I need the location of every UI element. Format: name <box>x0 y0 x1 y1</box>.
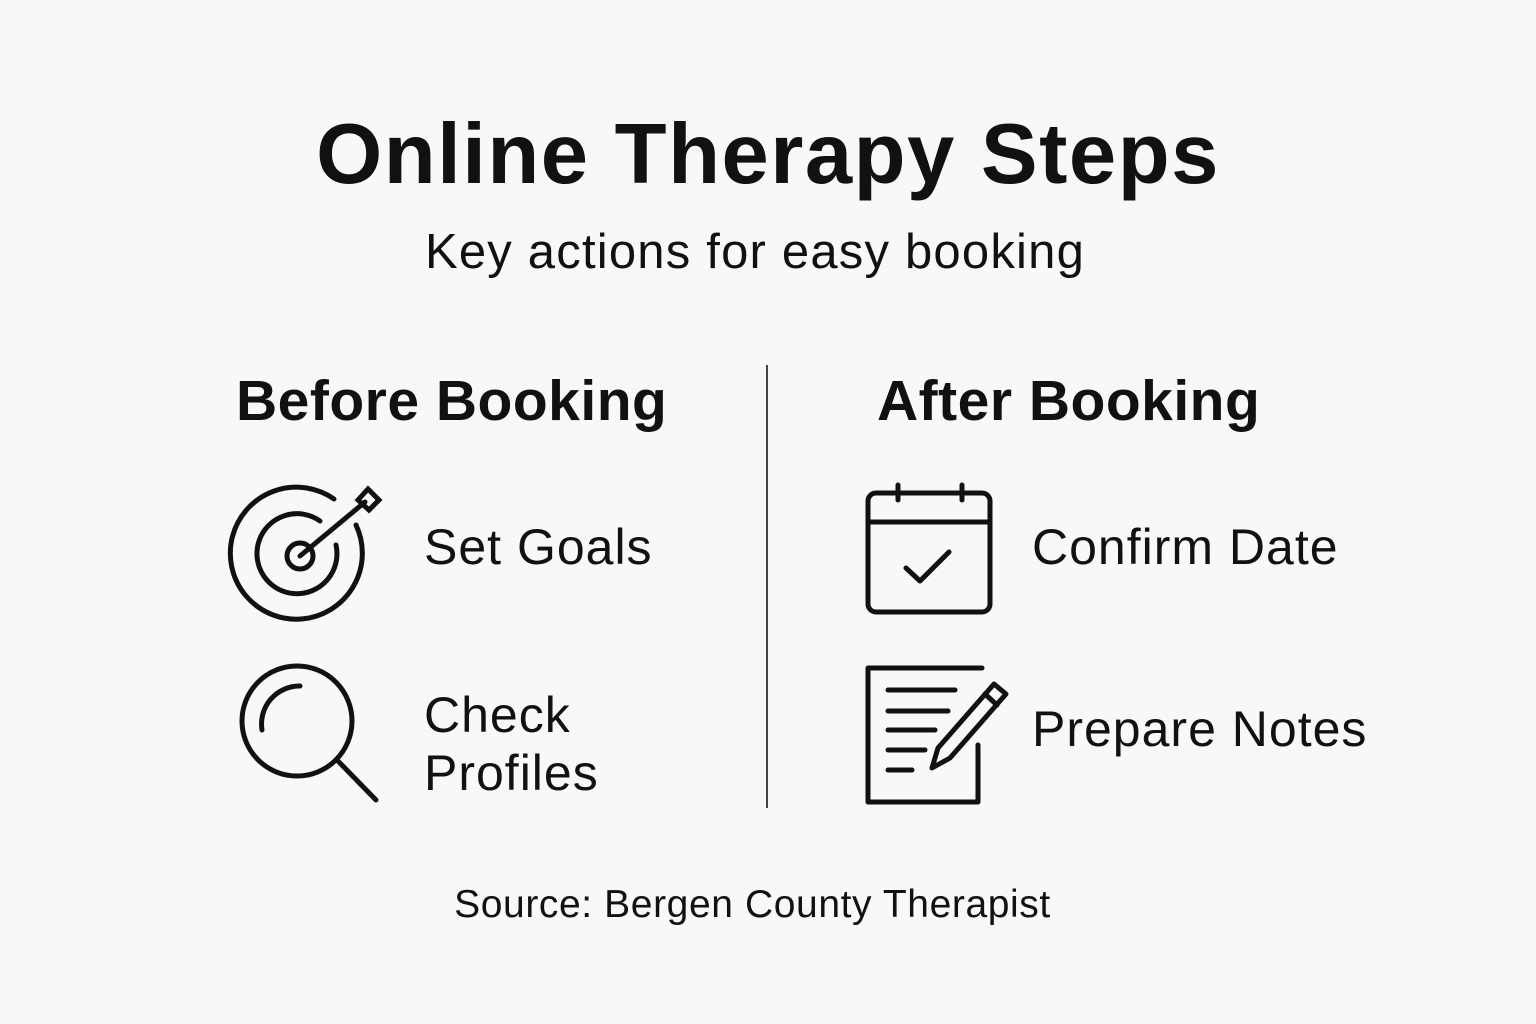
heading: before booking: Before Booking <box>236 369 667 433</box>
icon: target <box>228 484 382 622</box>
title: Online Therapy Steps <box>316 107 1220 202</box>
subtitle: Key actions for easy booking <box>425 225 1085 279</box>
heading: after booking: After Booking <box>877 369 1260 433</box>
text: check profiles: Profiles <box>424 745 599 801</box>
source: Source: Bergen County Therapist <box>454 883 1051 926</box>
text: check profiles <box>424 687 599 801</box>
icon: calendar <box>866 482 992 614</box>
icon: magnifier <box>240 664 378 802</box>
text: set goals: Set Goals <box>424 519 653 575</box>
divider <box>766 365 768 808</box>
icon: notes <box>866 666 1008 804</box>
text: prepare notes: Prepare Notes <box>1032 701 1367 757</box>
text: confirm date: Confirm Date <box>1032 519 1339 575</box>
text: check profiles: Check <box>424 687 571 743</box>
